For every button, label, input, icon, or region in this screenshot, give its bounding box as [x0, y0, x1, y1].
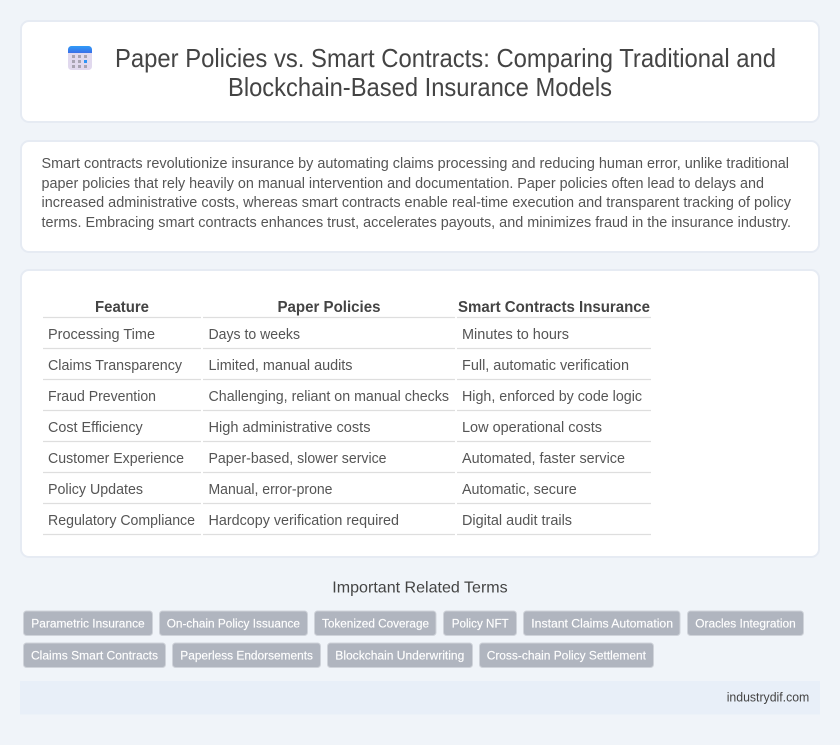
row: customer experience [48, 451, 625, 467]
row: regulatory compliance: Digital audit trails [462, 513, 572, 529]
footer [20, 681, 820, 714]
tag: Oracles Integration [695, 616, 796, 630]
text block: summary: paper policies that rely heavily on manual intervention and documentation. Paper policies often lead to delays and [42, 176, 764, 192]
tag: Instant Claims Automation [531, 616, 673, 630]
title: Blockchain-Based Insurance Models [228, 74, 612, 102]
table header row: Feature [95, 299, 149, 316]
icon: calendar [68, 46, 92, 70]
tag: Parametric Insurance [31, 616, 145, 630]
row: fraud prevention [48, 389, 642, 405]
panel: header [21, 21, 819, 122]
tag list [24, 611, 804, 668]
title [115, 45, 776, 102]
tag [444, 611, 516, 636]
row: policy updates: Manual, error-prone [208, 482, 332, 498]
panel: summary paragraph [21, 141, 819, 252]
row: claims transparency: Limited, manual audits [208, 358, 352, 374]
row: cost efficiency [48, 420, 602, 436]
row: processing time: Processing Time [48, 327, 155, 343]
tag: On-chain Policy Issuance [167, 616, 300, 630]
row: cost efficiency: Low operational costs [462, 420, 602, 436]
tag [688, 611, 804, 636]
text block: summary [42, 156, 792, 231]
panel: comparison table [21, 270, 819, 557]
row: claims transparency [48, 358, 629, 374]
row: fraud prevention: Fraud Prevention [48, 389, 156, 405]
table header row: Paper Policies [278, 299, 381, 316]
row: policy updates [48, 482, 577, 498]
row: regulatory compliance [48, 513, 572, 529]
row: policy updates: Policy Updates [48, 482, 143, 498]
row: processing time: Days to weeks [208, 327, 300, 343]
tag: Tokenized Coverage [322, 616, 429, 630]
table header row: Smart Contracts Insurance [458, 299, 650, 316]
row: fraud prevention: Challenging, reliant on manual checks [208, 389, 449, 405]
row: claims transparency: Full, automatic verification [462, 358, 629, 374]
row: policy updates: Automatic, secure [462, 482, 577, 498]
row: regulatory compliance: Hardcopy verification required [208, 513, 399, 529]
tag [524, 611, 680, 636]
footer: industrydif.com [727, 690, 809, 705]
tag: Blockchain Underwriting [335, 648, 464, 662]
tag [314, 611, 436, 636]
tag: Policy NFT [452, 616, 509, 630]
tag [328, 643, 472, 668]
tag [480, 643, 654, 668]
title: Paper Policies vs. Smart Contracts: Comparing Traditional and [115, 45, 776, 73]
row: processing time [48, 327, 569, 343]
tag [172, 643, 320, 668]
text block: summary: terms. Embracing smart contracts enhances trust, accelerates payouts, and minimizes fraud in the insurance industry. [42, 215, 791, 231]
tag [24, 643, 166, 668]
row: customer experience: Automated, faster service [462, 451, 625, 467]
text block: summary: Smart contracts revolutionize insurance by automating claims processing and reducing human error, unlike traditional [42, 156, 789, 172]
tag [24, 611, 152, 636]
tag [160, 611, 308, 636]
row: processing time: Minutes to hours [462, 327, 569, 343]
heading: important related terms: Important Related Terms [332, 580, 508, 597]
row: customer experience: Customer Experience [48, 451, 184, 467]
table header row [95, 299, 650, 316]
tag: Paperless Endorsements [180, 648, 313, 662]
row: claims transparency: Claims Transparency [48, 358, 183, 374]
row: cost efficiency: High administrative costs [208, 420, 370, 436]
row: regulatory compliance: Regulatory Compliance [48, 513, 195, 529]
text block: summary: increased administrative costs, whereas smart contracts enable real-time execution and transparent tracking of policy [42, 195, 792, 211]
tag: Claims Smart Contracts [31, 648, 158, 662]
row: customer experience: Paper-based, slower service [208, 451, 386, 467]
tag: Cross-chain Policy Settlement [487, 648, 647, 662]
row: cost efficiency: Cost Efficiency [48, 420, 143, 436]
row: fraud prevention: High, enforced by code logic [462, 389, 642, 405]
